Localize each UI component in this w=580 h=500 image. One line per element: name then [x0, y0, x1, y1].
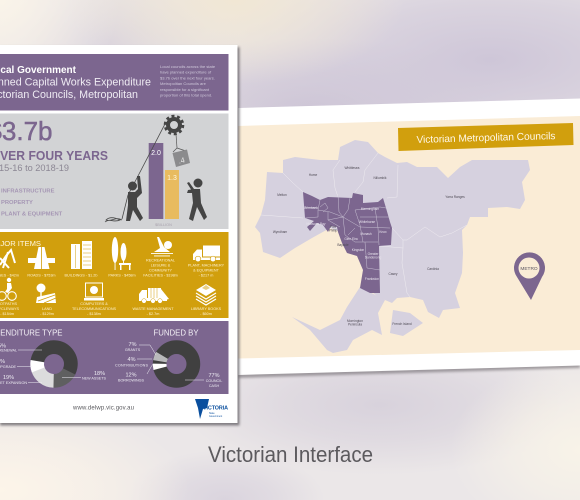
map labels: Manningham: [361, 207, 380, 211]
infographic sheet: [0, 45, 240, 426]
first row labels: FACILITIES - $198m: [143, 274, 178, 278]
icon: metro pin: [514, 252, 545, 300]
funded labels: 7%: [129, 342, 137, 348]
map labels: Hobsons Bay: [307, 222, 326, 226]
first row labels: RECREATIONAL: [146, 258, 175, 262]
map labels: Monash: [360, 232, 372, 236]
map labels: Hume: [309, 173, 317, 177]
first row labels: [0, 258, 225, 278]
first row labels: COMMUNITY: [149, 268, 173, 272]
legend: INFRASTRUCTURE: [1, 188, 55, 194]
map: metropolitan councils: [303, 192, 392, 293]
second row labels: COMPUTERS &: [80, 302, 108, 306]
map labels: Port: [330, 225, 336, 229]
map labels: Glen Eira: [344, 237, 358, 241]
map labels: Brimbank: [304, 206, 318, 210]
text block: header intro: have planned expenditure of: [160, 70, 212, 75]
map labels: Bayside: [337, 243, 349, 247]
map labels: Kingston: [352, 248, 364, 252]
expenditure labels: NEW ASSETS: [82, 376, 107, 380]
map labels: Whittlesea: [345, 166, 360, 170]
icon: metro pin: METRO: [520, 266, 538, 272]
panel: total spend: [0, 114, 228, 229]
second row labels: WASTE MANAGEMENT: [132, 307, 174, 311]
map title banner: Victorian Metropolitan Councils: [416, 131, 556, 146]
legend: [1, 188, 63, 218]
second row labels: - $138m: [87, 312, 101, 316]
icon: swimmer: [151, 237, 173, 256]
icon: laptop: [84, 283, 104, 300]
map sheet: [238, 98, 580, 378]
panel: major items: [0, 232, 228, 318]
map labels: Phillip: [329, 228, 337, 232]
icon: land: [36, 284, 56, 303]
map labels: Peninsula: [348, 322, 362, 326]
funded leader lines: [137, 345, 204, 380]
first row labels: PARKS - $458m: [108, 274, 136, 278]
map labels: Frankston: [365, 277, 379, 281]
funded labels: 77%: [208, 373, 220, 379]
second row labels: LAND: [42, 307, 52, 311]
map labels: Mornington: [347, 319, 363, 323]
heading: [0, 65, 151, 101]
icon: right person: [187, 178, 207, 221]
second row labels: - $154m: [0, 312, 14, 316]
funded labels: GRANTS: [125, 348, 141, 352]
funded labels: 4%: [128, 357, 136, 363]
icon: truck: [193, 246, 220, 262]
funded labels: [115, 342, 222, 388]
logo: Victoria State Government: Government: [209, 415, 222, 418]
funded labels: CASH: [209, 384, 219, 388]
funded labels: BORROWINGS: [118, 378, 145, 382]
text block: header intro: Local councils across the state: [160, 64, 216, 69]
second row labels: - $60m: [200, 312, 212, 316]
map labels: Dandenong: [365, 256, 381, 260]
legend: PLANT & EQUIPMENT: [1, 212, 63, 218]
map title banner: [398, 123, 574, 151]
funded labels: CONTRIBUTIONS: [115, 364, 149, 368]
logo: Victoria State Government: [195, 399, 228, 419]
icon: gear and hanging block: .4: [178, 155, 186, 166]
first row labels: & EQUIPMENT: [193, 268, 220, 272]
donut chart: expenditure type: [31, 341, 77, 387]
icon: buildings: [71, 241, 92, 269]
icon: library books: [196, 284, 216, 305]
logo: Victoria State Government: VICTORIA: [203, 406, 228, 412]
icon: parks: [112, 237, 131, 270]
map labels: Nillumbik: [374, 176, 387, 180]
funded labels: COUNCIL: [206, 379, 222, 383]
second row labels: - $2.7m: [147, 312, 159, 316]
second row labels: LIBRARY BOOKS: [191, 307, 222, 311]
icon: roads: [28, 247, 55, 269]
map labels: Knox: [379, 230, 387, 234]
icon: rope: [105, 122, 166, 222]
icon: cyclist: [0, 278, 16, 300]
map labels: Whitehorse: [359, 220, 375, 224]
icon: garbage truck: [139, 288, 169, 303]
first row labels: BUILDINGS - $1.2b: [65, 274, 97, 278]
first row labels: LEISURE &: [151, 264, 171, 268]
text block: header intro: $3.7b over the next four years.: [160, 75, 215, 80]
expenditure labels: [0, 344, 107, 385]
expenditure labels: 18%: [94, 371, 105, 377]
expenditure leader lines: [17, 350, 81, 382]
map labels: Melton: [277, 193, 287, 197]
map: outer councils: [255, 140, 530, 353]
panel: expenditure and funding: [0, 321, 228, 394]
heading: funded by: FUNDED BY: [153, 328, 199, 338]
icon: bridge: [0, 250, 15, 268]
funded labels: 12%: [125, 372, 137, 378]
logo: Victoria State Government: State: [209, 412, 215, 415]
legend: PROPERTY: [1, 200, 33, 206]
map labels: Yarra Ranges: [445, 195, 465, 199]
second row labels: TELECOMMUNICATIONS: [72, 307, 117, 311]
panel: header: [0, 54, 228, 110]
icon: gear and hanging block: [165, 116, 190, 167]
map labels: Casey: [388, 272, 398, 276]
bar chart: [149, 143, 179, 227]
caption: Victorian Interface: [208, 442, 373, 467]
map labels: [273, 166, 465, 326]
second row labels: - $129m: [40, 312, 54, 316]
text block: header intro: responsible for a significant: [160, 87, 210, 92]
second row labels: [0, 302, 222, 316]
text block: header intro: proportion of this total spend.: [160, 92, 212, 98]
map labels: French Island: [392, 322, 412, 326]
map labels: Cardinia: [427, 267, 439, 271]
text block: header intro: Metropolitan Councils are: [160, 81, 207, 86]
text block: header intro: [160, 64, 216, 98]
icon: left person: [126, 176, 143, 221]
first row labels: ROADS - $753m: [27, 274, 56, 278]
map labels: Wyndham: [273, 230, 288, 234]
first row labels: PLANT, MACHINERY: [188, 264, 225, 268]
footer url: www.delwp.vic.gov.au: [72, 406, 134, 412]
first row labels: - $217 m: [199, 274, 213, 278]
bar chart: 2.0: [151, 150, 161, 157]
bar chart: $BILLION: [155, 223, 172, 227]
donut chart: funded by: [156, 344, 197, 384]
bar chart: 1.3: [167, 175, 177, 182]
expenditure labels: 19%: [3, 375, 14, 381]
map labels: Greater: [368, 252, 379, 256]
